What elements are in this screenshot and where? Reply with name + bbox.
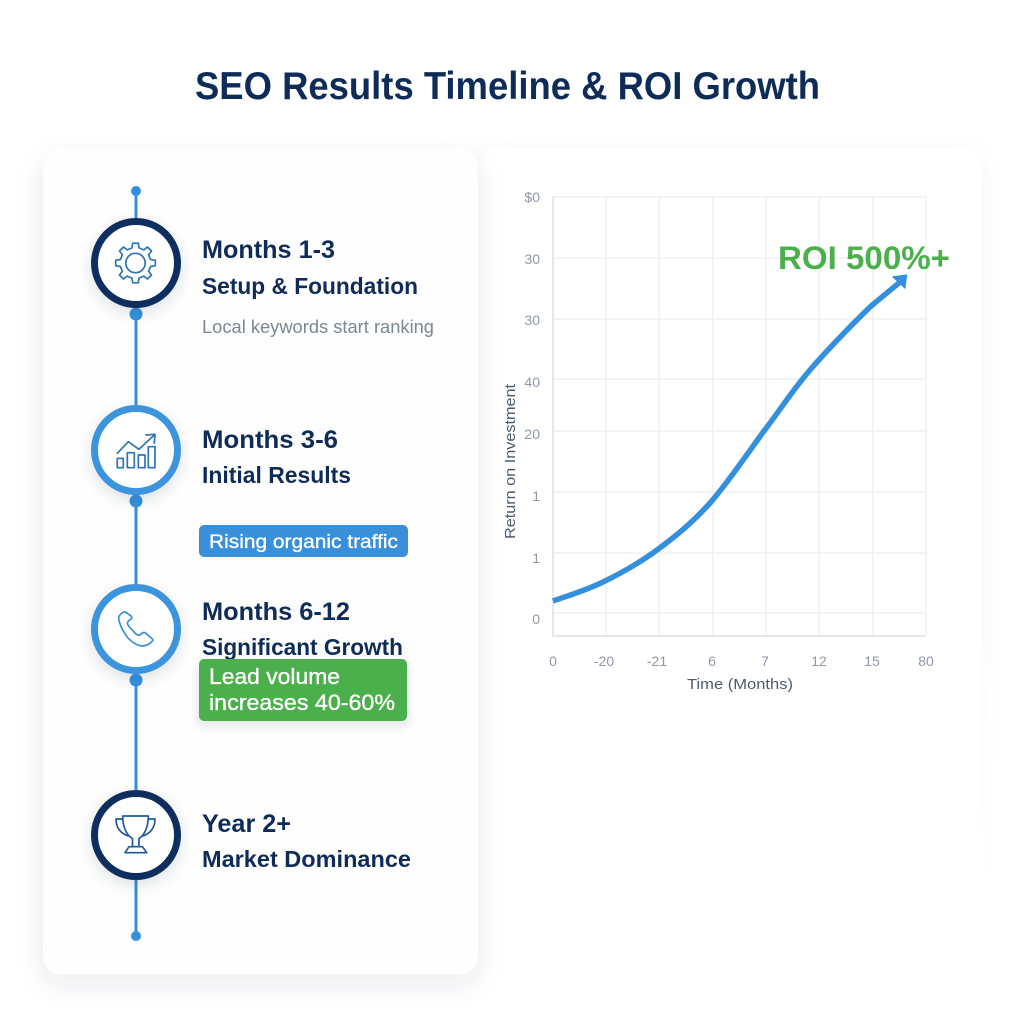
y axis labels: 30	[524, 251, 540, 267]
infographic canvas	[38, 70, 949, 988]
panel: ROI chart	[478, 148, 981, 908]
step 1 heading: Months 1-3	[202, 236, 335, 264]
step 2: months 3-6	[94, 408, 408, 557]
callout: lead volume: Lead volume	[209, 664, 340, 689]
step 4: year 2+	[94, 794, 411, 876]
y axis labels: 40	[524, 374, 540, 390]
icon: rising bar chart	[94, 408, 178, 492]
step 3 heading: Months 6-12	[202, 598, 350, 626]
x axis labels: 12	[811, 653, 827, 669]
y axis labels	[524, 189, 540, 627]
step 1 note: Local keywords start ranking	[202, 317, 434, 337]
title: SEO Results Timeline & ROI Growth	[195, 65, 820, 108]
callout: ROI 500%+: ROI 500%+	[778, 240, 950, 276]
growth curve with arrow	[553, 275, 907, 601]
panel: timeline	[43, 148, 478, 974]
timeline line with end dots	[130, 186, 142, 941]
callout: rising organic traffic: Rising organic traffic	[209, 531, 398, 553]
icon: phone	[94, 588, 178, 670]
icon: gear	[94, 222, 178, 304]
y axis labels: 1	[532, 550, 540, 566]
callout: lead volume: increases 40-60%	[209, 690, 395, 715]
icon: trophy	[94, 794, 178, 876]
x axis labels: 7	[761, 653, 769, 669]
step 3: months 6-12	[94, 588, 407, 721]
x axis labels: -21	[647, 653, 667, 669]
x axis labels: 15	[864, 653, 880, 669]
step 4 heading: Year 2+	[202, 810, 291, 838]
x axis labels: 0	[549, 653, 557, 669]
y axis labels: $0	[524, 189, 540, 205]
y axis labels: 1	[532, 488, 540, 504]
x axis labels: -20	[594, 653, 614, 669]
step 3 subheading: Significant Growth	[202, 634, 403, 660]
line chart: ROI over time	[503, 189, 950, 693]
x axis title: Time (Months)	[687, 676, 793, 693]
step 1: months 1-3	[94, 222, 434, 337]
callout: rising organic traffic	[199, 525, 408, 557]
step 1 subheading: Setup & Foundation	[202, 273, 418, 299]
y axis labels: 20	[524, 426, 540, 442]
step 2 subheading: Initial Results	[202, 462, 351, 488]
y axis title: Return on Investment	[503, 384, 519, 539]
y axis labels: 0	[532, 611, 540, 627]
x axis labels: 6	[708, 653, 716, 669]
step 4 subheading: Market Dominance	[202, 846, 411, 872]
callout: lead volume	[199, 659, 407, 721]
step 2 heading: Months 3-6	[202, 426, 338, 454]
x axis labels: 80	[918, 653, 934, 669]
x axis labels	[549, 653, 934, 669]
y axis labels: 30	[524, 312, 540, 328]
